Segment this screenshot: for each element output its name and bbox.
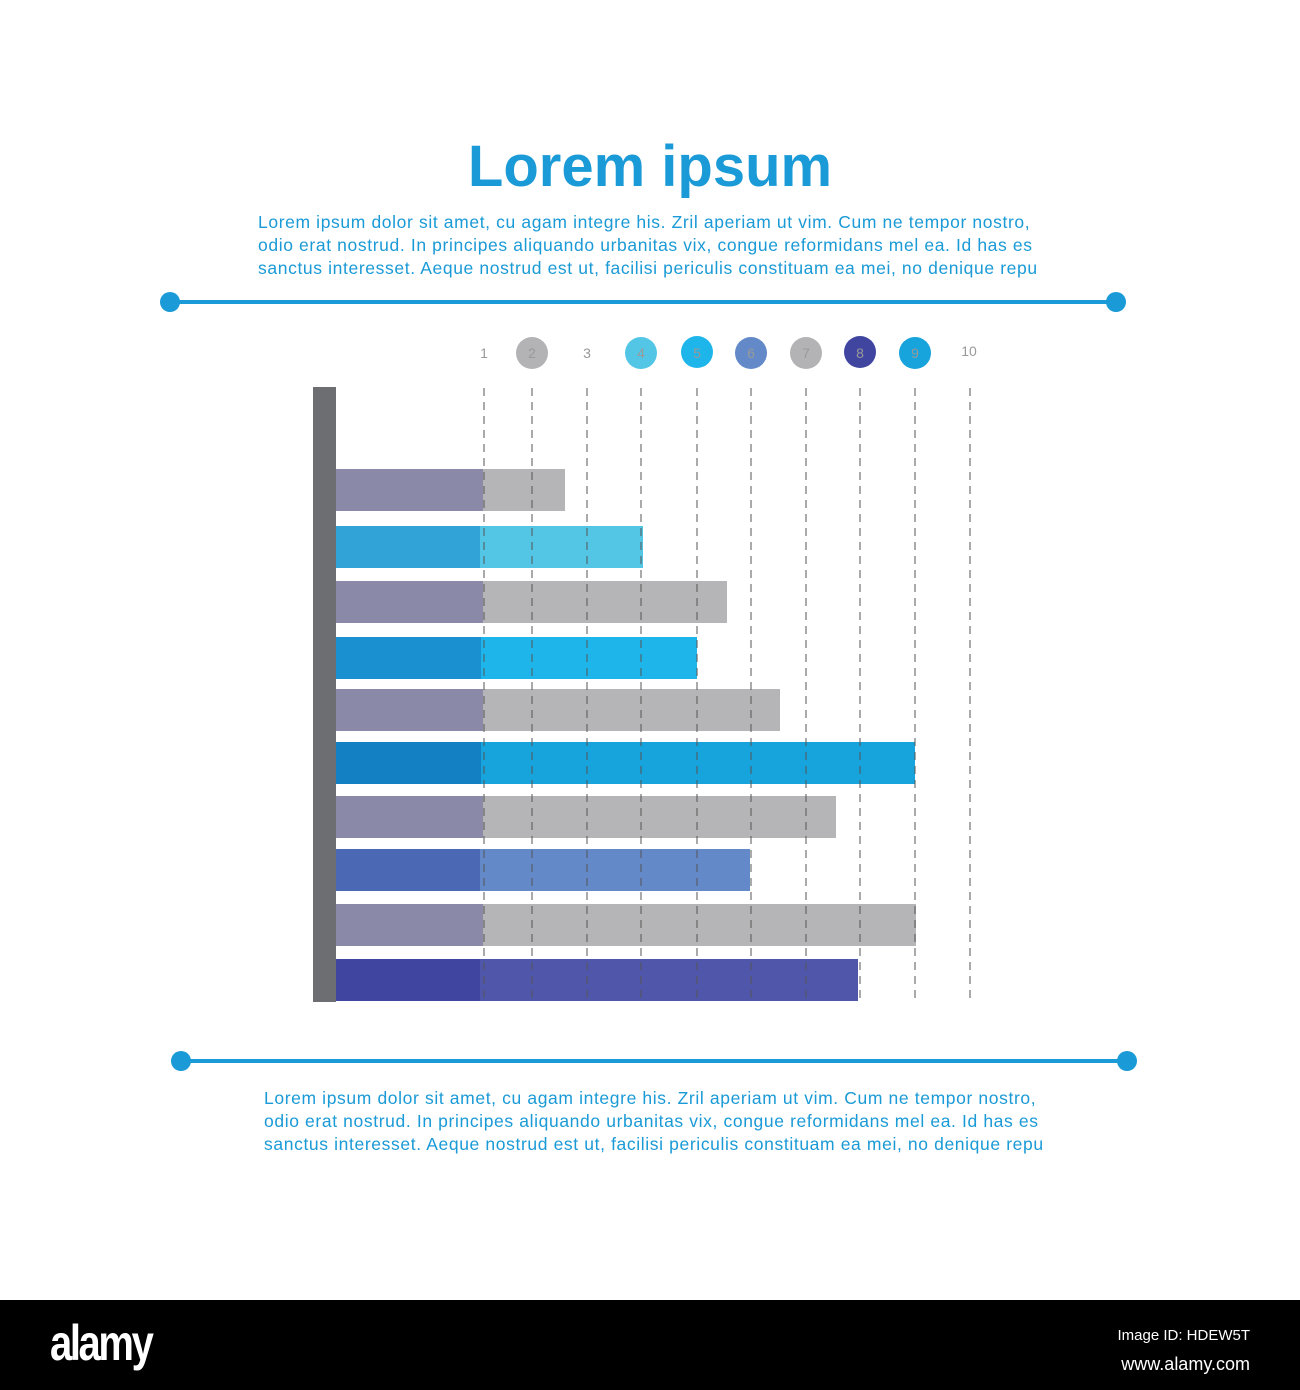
axis labels: 10: [961, 343, 977, 359]
bottom divider line: [171, 1051, 1137, 1071]
footer bar: [0, 1300, 1300, 1390]
axis labels: 1: [480, 345, 488, 361]
footer info: Image ID: HDEW5T: [1117, 1327, 1250, 1344]
axis labels: 9: [911, 345, 919, 361]
axis bar: [313, 387, 336, 1002]
footer logo: alamy: [50, 1315, 151, 1371]
top text block: sanctus interesset. Aeque nostrud est ut, facilisi periculis constituam ea mei, no denique repu: [258, 258, 1038, 278]
top divider line: [160, 292, 1126, 312]
top text block: [258, 212, 1038, 278]
axis labels: 8: [856, 345, 864, 361]
bars: [336, 469, 916, 1001]
title: Lorem ipsum: [468, 134, 832, 199]
axis labels: 4: [637, 345, 645, 361]
bottom text block: [264, 1088, 1044, 1154]
footer info: [1117, 1327, 1250, 1374]
bottom text block: odio erat nostrud. In principes aliquando urbanitas vix, congue reformidans mel ea. Id has es: [264, 1111, 1039, 1131]
bottom text block: sanctus interesset. Aeque nostrud est ut, facilisi periculis constituam ea mei, no denique repu: [264, 1134, 1044, 1154]
axis labels: 6: [747, 345, 755, 361]
axis labels: 2: [528, 345, 536, 361]
top text block: odio erat nostrud. In principes aliquando urbanitas vix, congue reformidans mel ea. Id has es: [258, 235, 1033, 255]
top text block: Lorem ipsum dolor sit amet, cu agam integre his. Zril aperiam ut vim. Cum ne tempor nostro,: [258, 212, 1030, 232]
bottom text block: Lorem ipsum dolor sit amet, cu agam integre his. Zril aperiam ut vim. Cum ne tempor nostro,: [264, 1088, 1036, 1108]
footer info: www.alamy.com: [1121, 1354, 1250, 1374]
axis labels: [480, 336, 977, 369]
axis labels: 3: [583, 345, 591, 361]
axis labels: 5: [693, 345, 701, 361]
axis labels: 7: [802, 345, 810, 361]
